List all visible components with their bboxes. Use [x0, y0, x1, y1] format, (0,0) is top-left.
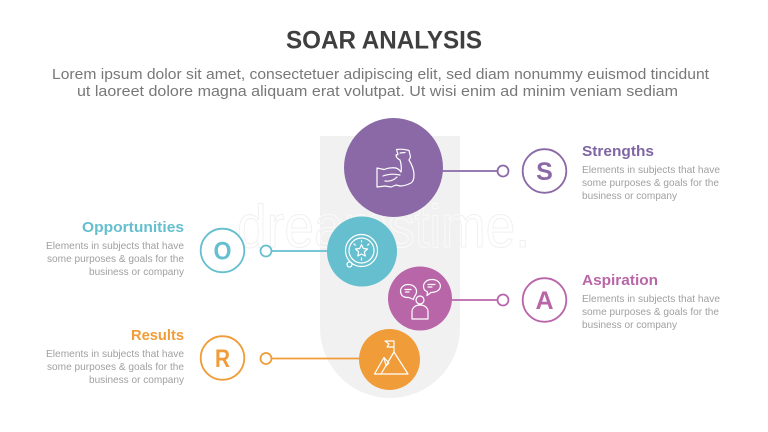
text block: opportunities: Opportunities	[82, 219, 184, 236]
text block: strengths: Elements in subjects that have	[582, 164, 720, 176]
letter badge O	[201, 229, 244, 272]
text block: results	[46, 327, 185, 386]
letter badge S	[523, 149, 566, 193]
connector: strengths	[440, 166, 508, 176]
icon: person with speech bubbles	[401, 280, 440, 319]
intro text: Lorem ipsum dolor sit amet, consectetuer adipiscing elit, sed diam nonummy euismod tincidunt	[52, 67, 709, 83]
letter badge A	[523, 278, 566, 322]
purple circle with bicep icon	[344, 118, 443, 217]
text block: results: Results	[131, 327, 184, 344]
text block: strengths: some purposes & goals for the	[582, 177, 719, 189]
intro text: ut laoreet dolore magna aliquam erat volutpat. Ut wisi enim ad minim veniam sediam	[77, 84, 678, 100]
text block: opportunities: Elements in subjects that have	[46, 240, 184, 252]
text block: strengths: Strengths	[582, 143, 654, 160]
letter badge R	[201, 336, 244, 380]
icon: star badge	[346, 234, 378, 267]
text block: aspiration: some purposes & goals for the	[582, 306, 719, 318]
text block: strengths: business or company	[582, 190, 678, 202]
text block: aspiration: Elements in subjects that have	[582, 293, 720, 305]
text block: strengths	[582, 143, 720, 202]
title: SOAR ANALYSIS	[286, 26, 482, 54]
letter badge S: S	[536, 158, 553, 186]
text block: aspiration	[582, 272, 720, 331]
text block: aspiration: business or company	[582, 319, 678, 331]
teal circle with compass icon	[327, 216, 397, 286]
text block: results: some purposes & goals for the	[47, 361, 184, 373]
capsule background	[320, 136, 460, 398]
intro text	[52, 67, 709, 100]
letter badge R: R	[215, 345, 230, 373]
text block: results: Elements in subjects that have	[46, 348, 184, 360]
watermark over capsule: dreamstime.	[237, 193, 530, 260]
letter badge A: A	[535, 287, 554, 315]
text block: aspiration: Aspiration	[582, 272, 658, 289]
connector: aspiration	[450, 294, 508, 306]
icon: mountain with flag	[374, 341, 408, 374]
connector: results	[260, 353, 362, 364]
magenta circle with people talking icon	[388, 266, 452, 330]
text block: opportunities: some purposes & goals for the	[47, 253, 184, 265]
text block: opportunities	[46, 219, 185, 278]
icon: flexed arm	[377, 149, 414, 187]
connector: opportunities	[260, 246, 330, 256]
text block: opportunities: business or company	[89, 266, 185, 278]
letter badge O: O	[214, 238, 232, 266]
text block: results: business or company	[89, 374, 185, 386]
orange circle with mountain icon	[359, 329, 420, 390]
watermark: dreamstime.	[237, 193, 530, 260]
